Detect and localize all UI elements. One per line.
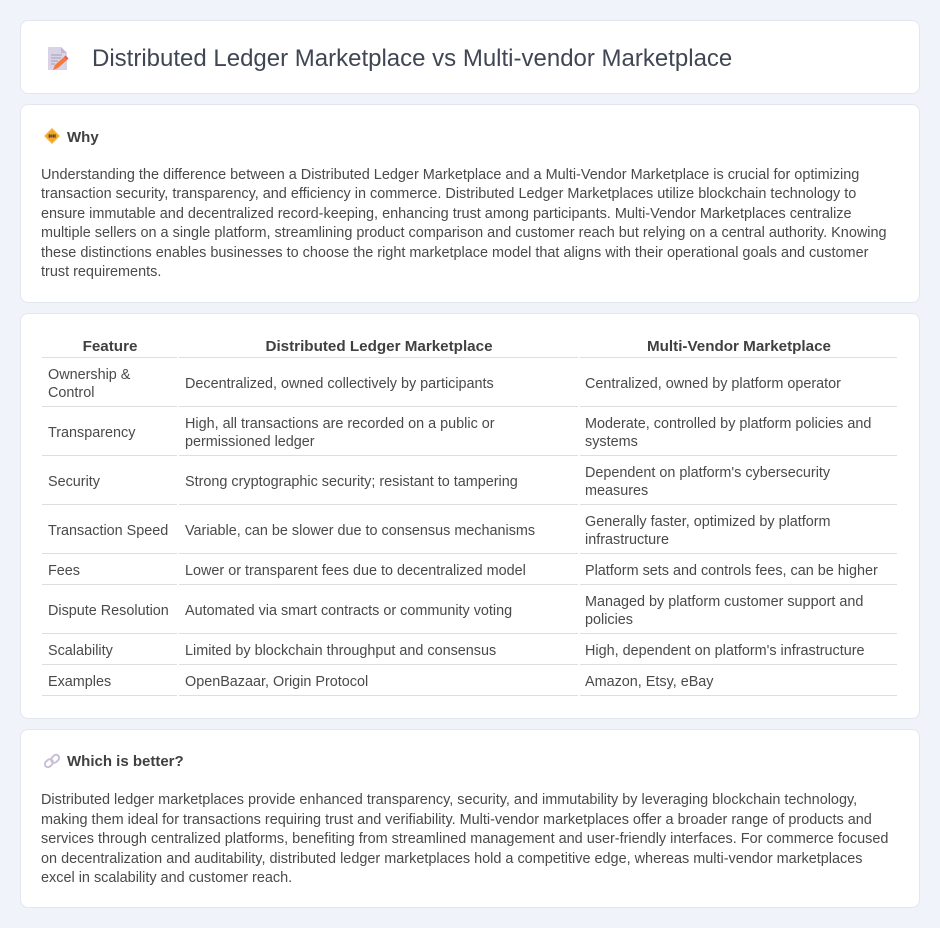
table row: ownership: Control — [48, 385, 94, 401]
table row: transparency: permissioned ledger — [185, 434, 315, 450]
panel: why — [20, 104, 920, 303]
table row: scalability: Limited by blockchain throughput and consensus — [185, 643, 496, 659]
heading: why: Why — [67, 129, 99, 146]
table row: dispute resolution — [48, 594, 863, 628]
text block: why: multiple sellers on a single platform, streamlining product comparison and customer reach but relying on a central authority. Knowing — [41, 225, 887, 241]
panel: header — [20, 20, 920, 94]
table row: scalability: High, dependent on platform's infrastructure — [585, 643, 865, 659]
table row: examples: Examples — [48, 674, 111, 690]
table row: examples: OpenBazaar, Origin Protocol — [185, 674, 368, 690]
text block: why: Understanding the difference between a Distributed Ledger Marketplace and a Multi-Vendor Marketplace is crucial for optimizing — [41, 167, 859, 183]
table row: security: Security — [48, 474, 100, 490]
table header — [83, 338, 831, 355]
table row: scalability: Scalability — [48, 643, 113, 659]
table row: transaction speed: Transaction Speed — [48, 523, 168, 539]
table row: transaction speed: Variable, can be slower due to consensus mechanisms — [185, 523, 535, 539]
text block: which is better: excel in scalability and customer reach. — [41, 870, 292, 886]
table row: dispute resolution: Managed by platform customer support and — [585, 594, 863, 610]
text block: why: these distinctions enables businesses to choose the right marketplace model that aligns with their operational goals and customer — [41, 245, 868, 261]
icon: document with pencil — [48, 47, 68, 70]
text block: which is better: Distributed ledger marketplaces provide enhanced transparency, security, and immutability by leveraging blockchain technology, — [41, 792, 857, 808]
table row: transaction speed: Generally faster, optimized by platform — [585, 514, 831, 530]
table row: examples — [48, 674, 714, 690]
text block: which is better — [41, 792, 888, 886]
table row: dispute resolution: policies — [585, 612, 633, 628]
table row: ownership: Centralized, owned by platform operator — [585, 376, 841, 392]
text block: which is better: making them ideal for transactions requiring trust and verifiability. Multi-vendor marketplaces offer a broader range of products and — [41, 812, 872, 828]
text block: why — [41, 167, 887, 280]
table row: examples: Amazon, Etsy, eBay — [585, 674, 714, 690]
table row: security: Dependent on platform's cybersecurity — [585, 465, 830, 481]
icon: link — [44, 754, 60, 768]
table row: dispute resolution: Dispute Resolution — [48, 603, 169, 619]
table row: transparency: Transparency — [48, 425, 135, 441]
table header: Feature — [83, 338, 137, 355]
table row: ownership: Ownership & — [48, 367, 130, 383]
table row: fees: Fees — [48, 563, 80, 579]
heading: which is better: Which is better? — [67, 753, 184, 770]
table row: transaction speed — [48, 514, 831, 548]
table row: transparency — [48, 416, 871, 450]
icon: diamond sign — [44, 128, 60, 144]
table row: transparency: High, all transactions are recorded on a public or — [185, 416, 495, 432]
table row: security: Strong cryptographic security; resistant to tampering — [185, 474, 518, 490]
table row: transaction speed: infrastructure — [585, 532, 669, 548]
table row: ownership — [48, 367, 841, 401]
table row: security: measures — [585, 483, 648, 499]
text block: why: trust requirements. — [41, 264, 161, 280]
table row: scalability — [48, 643, 865, 659]
table row: transparency: systems — [585, 434, 638, 450]
table row: dispute resolution: Automated via smart contracts or community voting — [185, 603, 512, 619]
text block: why: transaction security, transparency, and efficiency in commerce. Distributed Ledger Marketplaces utilize blockchain technology to — [41, 186, 856, 202]
table row: security — [48, 465, 830, 499]
panel: which is better — [20, 729, 920, 908]
table row: transparency: Moderate, controlled by platform policies and — [585, 416, 871, 432]
title: Distributed Ledger Marketplace vs Multi-vendor Marketplace — [92, 45, 732, 72]
text block: which is better: on decentralization and auditability, distributed ledger marketplaces hold a competitive edge, whereas multi-vendor marketplaces — [41, 851, 863, 867]
table row: ownership: Decentralized, owned collectively by participants — [185, 376, 494, 392]
table row: fees — [48, 563, 878, 579]
text block: why: ensure immutable and decentralized record-keeping, enhancing trust among participants. Multi-Vendor Marketplaces centralize — [41, 206, 852, 222]
panel: comparison table — [20, 313, 920, 719]
table row: fees: Lower or transparent fees due to decentralized model — [185, 563, 526, 579]
table header: Distributed Ledger Marketplace — [265, 338, 493, 355]
text block: which is better: services through centralized platforms, benefiting from streamlined management and user-friendly interfaces. For commerce focused — [41, 831, 888, 847]
table header: Multi-Vendor Marketplace — [647, 338, 831, 355]
table row: fees: Platform sets and controls fees, can be higher — [585, 563, 878, 579]
